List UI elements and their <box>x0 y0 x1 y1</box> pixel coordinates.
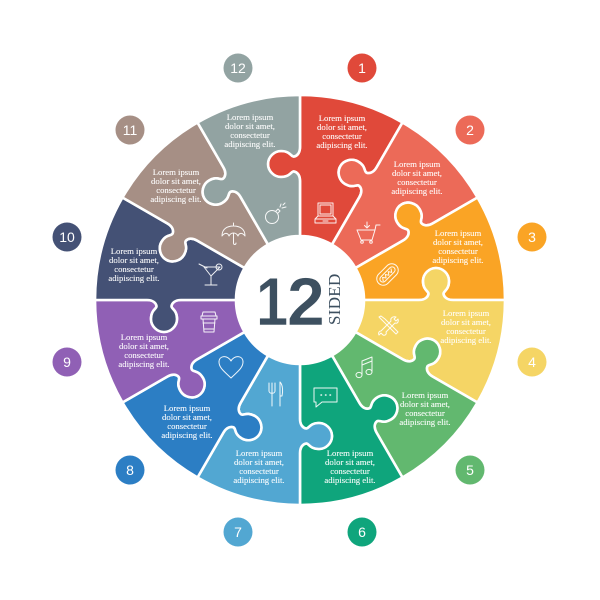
puzzle piece 3: consectetur <box>438 246 478 256</box>
puzzle piece 11: adipiscing elit. <box>150 194 202 204</box>
puzzle piece 2: consectetur <box>397 177 437 187</box>
center title: 12 sided: SIDED <box>325 273 344 325</box>
puzzle piece 2: dolor sit amet, <box>392 168 442 178</box>
number badge 9 <box>52 348 82 376</box>
puzzle piece 12: dolor sit amet, <box>225 121 275 131</box>
puzzle piece 8 <box>109 297 300 494</box>
number badge 1: 1 <box>358 60 366 76</box>
puzzle piece 8: dolor sit amet, <box>162 412 212 422</box>
puzzle piece 8: adipiscing elit. <box>161 430 213 440</box>
icon: umbrella <box>222 223 245 244</box>
puzzle piece 9: dolor sit amet, <box>119 341 169 351</box>
puzzle piece 3 <box>332 170 529 361</box>
icon: laptop <box>315 203 336 223</box>
center title: 12 sided <box>237 237 363 363</box>
puzzle piece 5: Lorem ipsum <box>402 390 448 400</box>
puzzle piece 2: adipiscing elit. <box>391 186 443 196</box>
puzzle piece 6 <box>239 332 430 529</box>
number badge 5 <box>456 456 484 484</box>
number badge 1 <box>348 54 376 82</box>
number badge 4 <box>518 348 546 376</box>
puzzle piece 9: consectetur <box>124 350 164 360</box>
puzzle piece 7: consectetur <box>239 466 279 476</box>
number badge 5: 5 <box>466 462 474 478</box>
puzzle piece 12 <box>170 71 361 268</box>
puzzle piece 12: adipiscing elit. <box>224 139 276 149</box>
number badge 4: 4 <box>528 354 536 370</box>
icon: cocktail glass <box>199 264 222 285</box>
puzzle piece 6: Lorem ipsum <box>327 448 373 458</box>
puzzle piece 3: dolor sit amet, <box>433 237 483 247</box>
puzzle piece 2 <box>300 106 491 303</box>
number badge 10 <box>52 222 82 252</box>
number badge 3: 3 <box>528 229 536 245</box>
puzzle piece 4: consectetur <box>446 326 486 336</box>
puzzle piece 4: adipiscing elit. <box>440 335 492 345</box>
number badge 3 <box>518 222 546 252</box>
number badge 9: 9 <box>63 354 71 370</box>
number badge 12 <box>224 54 252 82</box>
icon: music notes <box>356 357 372 378</box>
center title: 12 sided: 2 <box>287 264 325 340</box>
puzzle piece 4: Lorem ipsum <box>443 308 489 318</box>
number badge 7 <box>224 518 252 546</box>
icon: heart <box>219 357 243 378</box>
puzzle piece 1: Lorem ipsum <box>319 113 365 123</box>
icon: speech bubble <box>314 388 337 407</box>
puzzle piece 11: Lorem ipsum <box>153 167 199 177</box>
number badge 11: 11 <box>123 122 137 138</box>
puzzle piece 9: adipiscing elit. <box>118 359 170 369</box>
puzzle piece 10: dolor sit amet, <box>109 255 159 265</box>
puzzle piece 4 <box>355 268 505 402</box>
icon: shopping cart <box>357 222 380 243</box>
puzzle piece 11: dolor sit amet, <box>151 176 201 186</box>
puzzle piece 8: consectetur <box>167 421 207 431</box>
puzzle piece 9 <box>71 239 268 430</box>
puzzle piece 5: adipiscing elit. <box>399 417 451 427</box>
puzzle piece 4: dolor sit amet, <box>441 317 491 327</box>
number badge 8 <box>116 456 144 484</box>
number badge 10: 10 <box>59 229 75 245</box>
puzzle piece 9: Lorem ipsum <box>121 332 167 342</box>
icon: fork and knife <box>269 382 283 406</box>
puzzle piece 1: consectetur <box>322 131 362 141</box>
puzzle piece 10: Lorem ipsum <box>111 246 157 256</box>
number badge 7: 7 <box>234 524 242 540</box>
puzzle piece 1: adipiscing elit. <box>316 140 368 150</box>
puzzle piece 6: adipiscing elit. <box>324 475 376 485</box>
number badge 2: 2 <box>466 122 474 138</box>
puzzle piece 7: Lorem ipsum <box>236 448 282 458</box>
center title: 12 sided: 1 <box>256 265 288 340</box>
number badge 8: 8 <box>126 462 134 478</box>
number badge 11 <box>116 116 144 144</box>
icon: bomb <box>266 203 286 224</box>
puzzle piece 5: dolor sit amet, <box>400 399 450 409</box>
icon: wrench and screwdriver <box>379 316 398 335</box>
icon: coffee cup <box>201 312 217 332</box>
number badge 2 <box>456 116 484 144</box>
puzzle piece 5: consectetur <box>405 408 445 418</box>
puzzle piece 3: Lorem ipsum <box>435 228 481 238</box>
puzzle piece 10: consectetur <box>114 264 154 274</box>
puzzle piece 7: adipiscing elit. <box>233 475 285 485</box>
number badge 12: 12 <box>230 60 246 76</box>
puzzle piece 12: Lorem ipsum <box>227 112 273 122</box>
icon: hot dog <box>374 261 401 288</box>
puzzle piece 7: dolor sit amet, <box>234 457 284 467</box>
puzzle piece 8: Lorem ipsum <box>164 403 210 413</box>
number badge 6 <box>348 518 376 546</box>
puzzle piece 1 <box>268 95 402 245</box>
puzzle piece 11 <box>106 109 303 300</box>
puzzle piece 7 <box>198 355 332 505</box>
puzzle piece 10: adipiscing elit. <box>108 273 160 283</box>
puzzle piece 6: dolor sit amet, <box>325 457 375 467</box>
puzzle piece 1: dolor sit amet, <box>317 122 367 132</box>
puzzle piece 12: consectetur <box>230 130 270 140</box>
number badge 6: 6 <box>358 524 366 540</box>
puzzle piece 11: consectetur <box>156 185 196 195</box>
puzzle piece 2: Lorem ipsum <box>394 159 440 169</box>
puzzle piece 10 <box>95 198 245 332</box>
puzzle piece 3: adipiscing elit. <box>432 255 484 265</box>
puzzle piece 6: consectetur <box>330 466 370 476</box>
puzzle piece 5 <box>297 300 494 491</box>
